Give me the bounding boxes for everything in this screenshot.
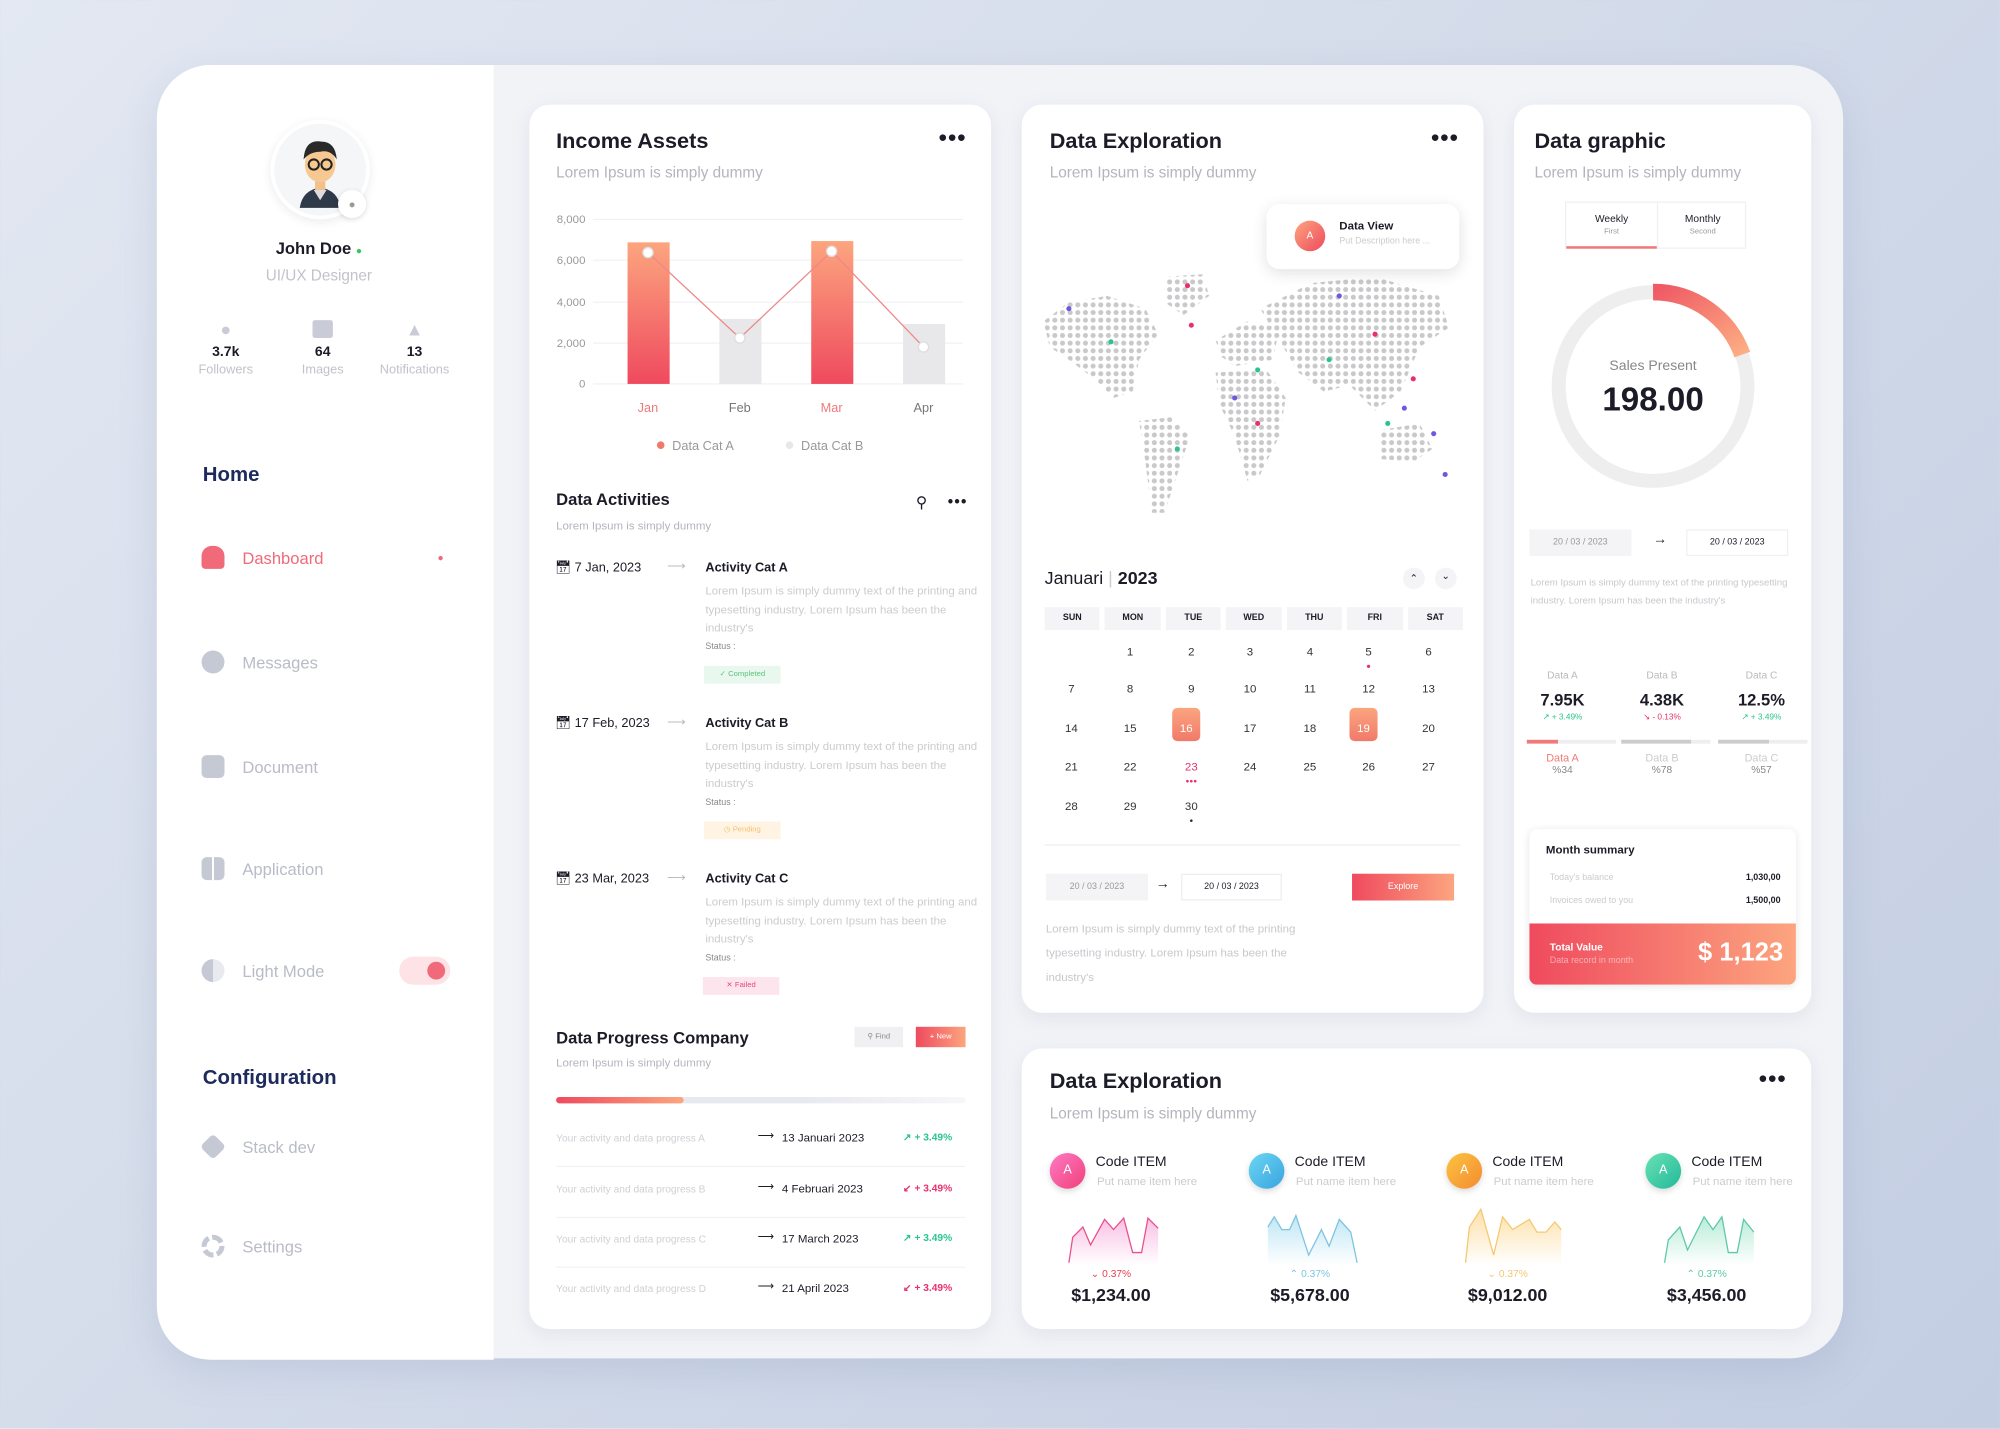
menu: document: Document bbox=[242, 757, 318, 776]
date range bbox=[1529, 529, 1631, 556]
calendar: 1 bbox=[1127, 645, 1133, 658]
panel: data exploration (map & calendar): 20 / 03 / 2023 bbox=[1204, 883, 1259, 892]
panel: data graphic: 20 / 03 / 2023 bbox=[1710, 538, 1765, 547]
activity C bbox=[555, 871, 977, 995]
panel: income assets bbox=[529, 105, 991, 1329]
activity B: Status : bbox=[705, 798, 736, 807]
panel: data exploration (map & calendar): ••• bbox=[1431, 125, 1459, 151]
calendar: 16 bbox=[1180, 722, 1193, 735]
calendar: 14 bbox=[1065, 722, 1078, 735]
calendar: 4 bbox=[1307, 645, 1313, 658]
month summary: Invoices owed to you bbox=[1550, 897, 1633, 906]
activity C: ⟶ bbox=[667, 871, 685, 885]
donut chart: Sales Present bbox=[1609, 357, 1697, 373]
activity A: ✓ Completed bbox=[720, 671, 765, 679]
progress rows bbox=[556, 1129, 966, 1295]
item 1: Code ITEM bbox=[1096, 1154, 1167, 1170]
stats: data A/B/C: ↗ + 3.49% bbox=[1742, 713, 1781, 722]
item 1: ⌄ 0.37% bbox=[1091, 1268, 1131, 1279]
calendar: 23 bbox=[1185, 760, 1198, 773]
progress rows: 4 Februari 2023 bbox=[782, 1182, 863, 1195]
activity A bbox=[555, 560, 977, 684]
bar chart: Mar bbox=[821, 400, 843, 415]
calendar: 2 bbox=[1188, 645, 1195, 658]
progress rows: Your activity and data progress D bbox=[556, 1283, 706, 1295]
calendar: Januari | 2023 bbox=[1045, 568, 1158, 588]
panel: income assets: Lorem Ipsum is simply dummy bbox=[556, 1056, 711, 1069]
stats: data A/B/C: 4.38K bbox=[1640, 690, 1684, 709]
item 4 bbox=[1644, 1153, 1793, 1305]
progress rows: ↙ + 3.49% bbox=[903, 1282, 952, 1293]
calendar: 17 bbox=[1244, 722, 1256, 735]
profile stats: 3.7k bbox=[212, 344, 239, 360]
calendar: ⌃ bbox=[1410, 573, 1418, 584]
progress rows: 17 March 2023 bbox=[782, 1232, 858, 1245]
bar chart: 2,000 bbox=[557, 338, 585, 350]
tabs bbox=[1565, 202, 1746, 249]
calendar: 12 bbox=[1362, 682, 1375, 695]
item 1: $1,234.00 bbox=[1071, 1284, 1151, 1305]
item 3: Put name item here bbox=[1494, 1175, 1594, 1187]
panel: data graphic: Lorem Ipsum is simply dummy text of the printing typesetting industry. Lorem Ipsum has been the industry's bbox=[1531, 577, 1787, 606]
heading: home: Home bbox=[203, 464, 260, 486]
progress rows: ↙ + 3.49% bbox=[903, 1182, 952, 1194]
profile stats: ● bbox=[220, 319, 231, 339]
bar chart: 6,000 bbox=[557, 255, 585, 267]
item 4: $3,456.00 bbox=[1667, 1284, 1746, 1305]
profile role: UI/UX Designer bbox=[266, 267, 372, 284]
activity B: Lorem Ipsum is simply dummy text of the printing and typesetting industry. Lorem Ipsum has been the industry's bbox=[705, 740, 977, 790]
panel: data exploration (map & calendar): Lorem Ipsum is simply dummy bbox=[1050, 163, 1256, 181]
bar chart: 4,000 bbox=[557, 297, 585, 309]
calendar: 5 bbox=[1365, 645, 1372, 658]
menu: dashboard: Dashboard bbox=[242, 548, 323, 567]
item 4: Put name item here bbox=[1693, 1175, 1793, 1187]
item 3 bbox=[1444, 1153, 1594, 1305]
stats: data A/B/C: ↗ + 3.49% bbox=[1543, 713, 1582, 722]
progress rows: Your activity and data progress A bbox=[556, 1133, 705, 1144]
tooltip: data view: Data View bbox=[1339, 219, 1393, 232]
calendar: 3 bbox=[1247, 645, 1253, 658]
progress rows: Your activity and data progress B bbox=[556, 1184, 705, 1195]
panel: income assets: + New bbox=[930, 1033, 952, 1041]
panel: income assets: Lorem Ipsum is simply dummy bbox=[556, 163, 763, 181]
activity B: ⟶ bbox=[667, 716, 685, 730]
calendar: 18 bbox=[1304, 722, 1316, 735]
date range & explore button: 20 / 03 / 2023 bbox=[1070, 883, 1124, 892]
title: Income Assets bbox=[556, 129, 708, 153]
menu: stack dev bbox=[202, 1135, 315, 1158]
panel: data exploration (map & calendar): → bbox=[1156, 876, 1170, 892]
activity B bbox=[555, 716, 977, 840]
panel: income assets: ⚲ Find bbox=[868, 1033, 890, 1041]
activity C: Status : bbox=[705, 954, 736, 963]
calendar: 13 bbox=[1422, 682, 1435, 695]
profile stats: 64 bbox=[315, 344, 331, 360]
date range & explore button bbox=[1046, 874, 1148, 901]
profile stats: Images bbox=[302, 364, 344, 378]
menu: light mode bbox=[202, 959, 324, 982]
calendar: SUN bbox=[1063, 614, 1082, 622]
item 2: Put name item here bbox=[1296, 1175, 1396, 1187]
panel: income assets: ••• bbox=[939, 125, 967, 151]
profile stats: 13 bbox=[407, 344, 422, 360]
month summary: $ 1,123 bbox=[1698, 939, 1783, 967]
month summary: 1,500,00 bbox=[1746, 897, 1781, 906]
menu: dashboard bbox=[202, 546, 444, 569]
calendar: 25 bbox=[1304, 760, 1316, 773]
progress rows: ↗ + 3.49% bbox=[903, 1232, 952, 1244]
panel: data graphic: Lorem Ipsum is simply dummy bbox=[1534, 163, 1741, 181]
section: data activities: Data Activities bbox=[556, 490, 670, 509]
profile stats: Followers bbox=[198, 364, 253, 378]
tooltip: data view bbox=[1267, 204, 1459, 269]
month summary: Month summary bbox=[1546, 843, 1635, 856]
progress rows: ↗ + 3.49% bbox=[903, 1131, 952, 1143]
activity A: Lorem Ipsum is simply dummy text of the printing and typesetting industry. Lorem Ipsum has been the industry's bbox=[705, 584, 977, 634]
menu: application: Application bbox=[242, 859, 323, 878]
calendar bbox=[1045, 568, 1463, 825]
progress rows: ⟶ bbox=[758, 1279, 774, 1292]
bar chart: 8,000 bbox=[557, 214, 585, 226]
panel: data exploration (sparklines) bbox=[1022, 1048, 1811, 1329]
progress rows: 13 Januari 2023 bbox=[782, 1131, 864, 1144]
month summary bbox=[1529, 829, 1796, 985]
panel: income assets: Lorem Ipsum is simply dummy bbox=[556, 519, 711, 532]
activity A: Activity Cat A bbox=[705, 561, 788, 575]
item 2: Code ITEM bbox=[1295, 1154, 1366, 1170]
calendar: MON bbox=[1122, 614, 1143, 622]
stats: data A/B/C: ↘ - 0.13% bbox=[1643, 713, 1681, 722]
tooltip: data view: Put Description here ... bbox=[1339, 237, 1430, 246]
profile stats: ▲ bbox=[406, 319, 423, 339]
calendar: 26 bbox=[1362, 760, 1375, 773]
menu: stack dev: Stack dev bbox=[242, 1137, 315, 1156]
activity A: 📅︎ 7 Jan, 2023 bbox=[555, 561, 641, 575]
menu: document bbox=[202, 755, 318, 778]
panel: income assets: ⚲ bbox=[916, 494, 927, 511]
item 1 bbox=[1048, 1153, 1197, 1305]
calendar: SAT bbox=[1427, 614, 1444, 622]
panel: data graphic bbox=[1514, 105, 1811, 1013]
panel: data graphic: → bbox=[1653, 532, 1667, 547]
item 4: Code ITEM bbox=[1691, 1154, 1762, 1170]
profile stats: Notifications bbox=[380, 364, 449, 378]
bar chart bbox=[557, 214, 963, 453]
menu: messages: Messages bbox=[242, 652, 318, 672]
menu: settings: Settings bbox=[242, 1237, 302, 1256]
bar chart: Apr bbox=[914, 400, 934, 415]
item 1: Put name item here bbox=[1097, 1175, 1197, 1187]
panel: income assets: ••• bbox=[948, 492, 968, 510]
activity B: ◷ Pending bbox=[724, 827, 761, 834]
item 2: $5,678.00 bbox=[1270, 1284, 1350, 1305]
menu: application bbox=[202, 857, 323, 880]
panel: data exploration (map & calendar): Data Exploration bbox=[1050, 129, 1222, 153]
stats: data A/B/C: Data A bbox=[1547, 670, 1578, 681]
stats: data A/B/C bbox=[1526, 670, 1808, 776]
calendar: 27 bbox=[1422, 760, 1435, 773]
progress bar bbox=[556, 1097, 966, 1103]
stats: data A/B/C: 7.95K bbox=[1540, 690, 1585, 709]
progress rows: 21 April 2023 bbox=[782, 1282, 849, 1295]
progress rows: ⟶ bbox=[758, 1180, 774, 1193]
calendar: 20 bbox=[1422, 722, 1435, 735]
item 4: A bbox=[1659, 1163, 1668, 1177]
progress rows: Your activity and data progress C bbox=[556, 1233, 706, 1245]
item 2: ⌃ 0.37% bbox=[1290, 1268, 1330, 1279]
activity C: Activity Cat C bbox=[705, 872, 788, 886]
calendar: TUE bbox=[1184, 614, 1202, 622]
stats: data A/B/C: %34 bbox=[1552, 764, 1573, 776]
calendar: 24 bbox=[1244, 760, 1256, 773]
stats: data A/B/C: %57 bbox=[1751, 764, 1772, 776]
donut chart bbox=[1552, 284, 1754, 488]
calendar: ⌄ bbox=[1442, 570, 1450, 582]
calendar: ● bbox=[1189, 818, 1193, 825]
menu: dashboard: ● bbox=[437, 552, 444, 563]
calendar: 15 bbox=[1124, 722, 1136, 735]
calendar: 19 bbox=[1357, 722, 1370, 735]
panel: data exploration (sparklines): Lorem Ipsum is simply dummy bbox=[1050, 1105, 1256, 1122]
panel: data exploration (sparklines): Data Exploration bbox=[1050, 1069, 1222, 1093]
tabs: First bbox=[1604, 228, 1619, 236]
item 3: $9,012.00 bbox=[1468, 1284, 1547, 1305]
month summary: Data record in month bbox=[1550, 957, 1633, 966]
activity B: 📅︎ 17 Feb, 2023 bbox=[555, 717, 650, 731]
donut chart: 198.00 bbox=[1602, 382, 1704, 419]
section: data progress company: Data Progress Company bbox=[556, 1028, 749, 1047]
item 2 bbox=[1246, 1153, 1396, 1305]
menu: light mode: Light Mode bbox=[242, 961, 324, 980]
panel: data exploration (map & calendar): Explore bbox=[1388, 883, 1418, 892]
progress rows: ⟶ bbox=[758, 1230, 774, 1242]
avatar badge bbox=[338, 190, 366, 218]
calendar: 22 bbox=[1124, 760, 1136, 773]
calendar: 11 bbox=[1304, 682, 1316, 695]
item 2: A bbox=[1262, 1163, 1271, 1177]
date range: 20 / 03 / 2023 bbox=[1553, 538, 1608, 547]
avatar bbox=[270, 120, 370, 219]
activity C: Lorem Ipsum is simply dummy text of the printing and typesetting industry. Lorem Ipsum has been the industry's bbox=[705, 895, 977, 945]
tooltip: data view: A bbox=[1307, 230, 1313, 241]
panel: data exploration (map & calendar) bbox=[1022, 105, 1483, 1013]
month summary: Total Value bbox=[1550, 941, 1603, 953]
heading: configuration: Configuration bbox=[203, 1068, 337, 1089]
profile name: John Doe ● bbox=[276, 239, 362, 258]
calendar: 6 bbox=[1425, 645, 1432, 658]
menu: messages bbox=[202, 650, 318, 674]
tabs: Weekly bbox=[1595, 213, 1628, 224]
calendar: 28 bbox=[1065, 800, 1078, 812]
profile stats bbox=[198, 319, 449, 378]
bar chart: Data Cat B bbox=[801, 438, 863, 453]
activity A: ⟶ bbox=[667, 560, 685, 574]
item 1: A bbox=[1063, 1163, 1072, 1177]
bar chart: 0 bbox=[579, 379, 585, 391]
calendar: 30 bbox=[1185, 800, 1198, 812]
avatar badge: ● bbox=[349, 198, 356, 210]
calendar: 29 bbox=[1124, 800, 1136, 812]
calendar: 21 bbox=[1065, 760, 1078, 773]
calendar: THU bbox=[1305, 614, 1323, 622]
calendar: 7 bbox=[1068, 682, 1075, 695]
dotted world map bbox=[1044, 274, 1448, 513]
item 3: ⌄ 0.37% bbox=[1487, 1268, 1528, 1279]
item 3: Code ITEM bbox=[1492, 1154, 1563, 1170]
panel: data exploration (sparklines): ••• bbox=[1759, 1066, 1787, 1092]
calendar: ●●● bbox=[1186, 778, 1197, 786]
stats: data A/B/C: 12.5% bbox=[1738, 690, 1785, 709]
activity C: ✕ Failed bbox=[726, 982, 756, 990]
calendar: FRI bbox=[1368, 614, 1382, 622]
sidebar bbox=[157, 65, 494, 1360]
bar chart: Data Cat A bbox=[672, 438, 734, 453]
stats: data A/B/C: Data B bbox=[1645, 751, 1679, 764]
activity A: Status : bbox=[705, 643, 736, 652]
month summary: Today's balance bbox=[1550, 874, 1614, 883]
toggle bbox=[399, 957, 450, 985]
progress rows: ⟶ bbox=[758, 1129, 774, 1142]
main container bbox=[157, 65, 1843, 1358]
stats: data A/B/C: Data C bbox=[1745, 751, 1778, 764]
bar chart: Jan bbox=[638, 400, 658, 415]
item 4: ⌃ 0.37% bbox=[1686, 1268, 1727, 1279]
stats: data A/B/C: %78 bbox=[1652, 764, 1672, 776]
activity B: Activity Cat B bbox=[705, 717, 788, 731]
calendar: ● bbox=[1366, 663, 1371, 671]
month summary: 1,030,00 bbox=[1746, 874, 1781, 883]
stats: data A/B/C: Data B bbox=[1646, 670, 1678, 681]
calendar: 9 bbox=[1188, 682, 1195, 695]
calendar: WED bbox=[1243, 614, 1264, 622]
tabs: Monthly bbox=[1685, 213, 1721, 224]
panel: data graphic: Data graphic bbox=[1534, 129, 1666, 153]
calendar: 8 bbox=[1127, 682, 1133, 695]
activity C: 📅︎ 23 Mar, 2023 bbox=[555, 872, 649, 886]
bar chart: Feb bbox=[729, 400, 751, 415]
panel: data exploration (map & calendar): Lorem Ipsum is simply dummy text of the printing typesetting industry. Lorem Ipsum has been the industry's bbox=[1046, 922, 1295, 983]
calendar: 10 bbox=[1244, 682, 1256, 695]
menu: settings bbox=[202, 1234, 302, 1258]
item 3: A bbox=[1460, 1163, 1469, 1177]
tabs: Second bbox=[1690, 228, 1716, 236]
stats: data A/B/C: Data C bbox=[1746, 670, 1777, 681]
stats: data A/B/C: Data A bbox=[1546, 751, 1579, 764]
